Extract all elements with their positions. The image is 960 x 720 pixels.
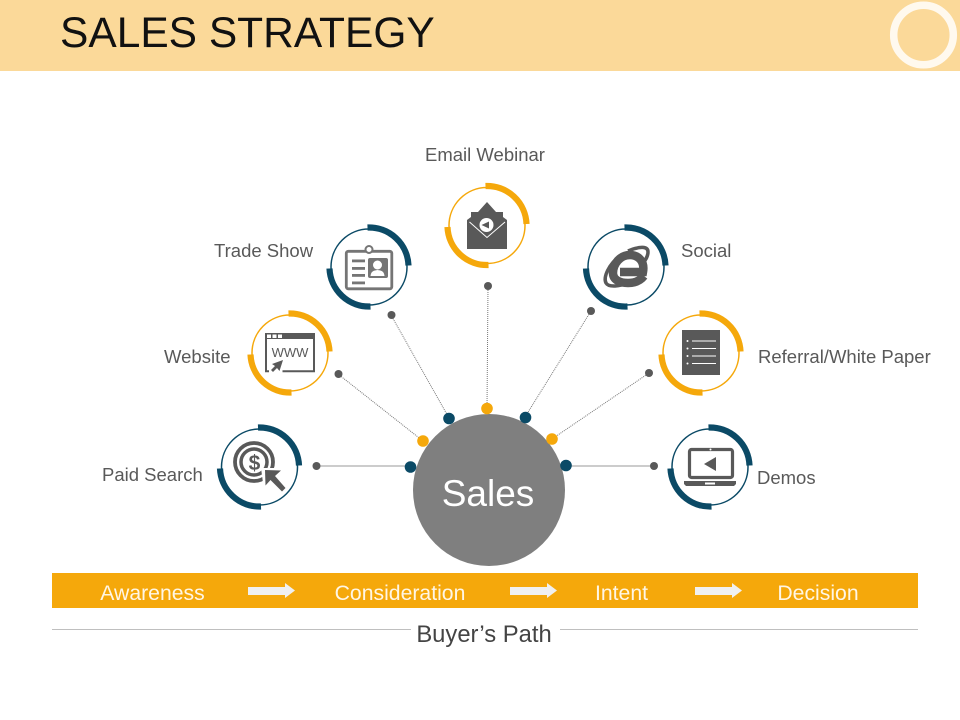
label: referral white paper: Referral/White Paper	[758, 346, 931, 367]
label: email webinar: Email Webinar	[425, 144, 545, 165]
icon: demos laptop	[684, 448, 736, 486]
label: demos: Demos	[757, 467, 816, 488]
buyer's journey band	[52, 573, 918, 608]
header ring decoration	[894, 5, 953, 65]
outer grey dots	[312, 282, 658, 470]
stage: consideration: Consideration	[335, 582, 465, 605]
ring: demos	[670, 427, 750, 507]
label: social: Social	[681, 240, 731, 261]
icon: social browser logo	[605, 247, 648, 286]
arrow: consideration to intent	[510, 583, 557, 598]
label: trade show: Trade Show	[214, 240, 314, 261]
arrow: awareness to consideration	[248, 583, 295, 598]
central sales circle	[413, 414, 565, 566]
icon: trade show badge	[346, 246, 392, 289]
title: SALES STRATEGY	[60, 10, 435, 57]
stage: intent: Intent	[595, 582, 648, 605]
ring: website	[250, 313, 330, 393]
icon: referral document	[682, 330, 720, 375]
ring: referral white paper	[662, 313, 740, 393]
icon: paid search target and cursor: $	[249, 452, 261, 475]
buyer's path caption: Buyer’s Path	[416, 621, 552, 648]
icon: paid search target and cursor	[235, 443, 288, 494]
stage: awareness: Awareness	[100, 582, 205, 605]
buyer's path caption rule right	[560, 628, 918, 630]
ring: email webinar	[448, 186, 526, 265]
ring: trade show	[330, 227, 408, 307]
icon: website browser window: WWW	[272, 345, 309, 360]
label: website: Website	[164, 346, 230, 367]
header band	[0, 0, 960, 71]
stage: decision: Decision	[777, 582, 859, 605]
buyer's path caption rule left	[52, 628, 411, 630]
inner connector dots	[405, 403, 572, 473]
arrow: intent to decision	[695, 583, 742, 598]
central sales circle: Sales	[442, 473, 534, 514]
icon: email webinar envelope	[467, 202, 507, 249]
ring: paid search	[220, 427, 299, 507]
ring: social	[586, 227, 666, 307]
connector lines	[316, 286, 654, 466]
icon: website browser window	[265, 333, 315, 372]
label: paid search: Paid Search	[102, 464, 203, 485]
